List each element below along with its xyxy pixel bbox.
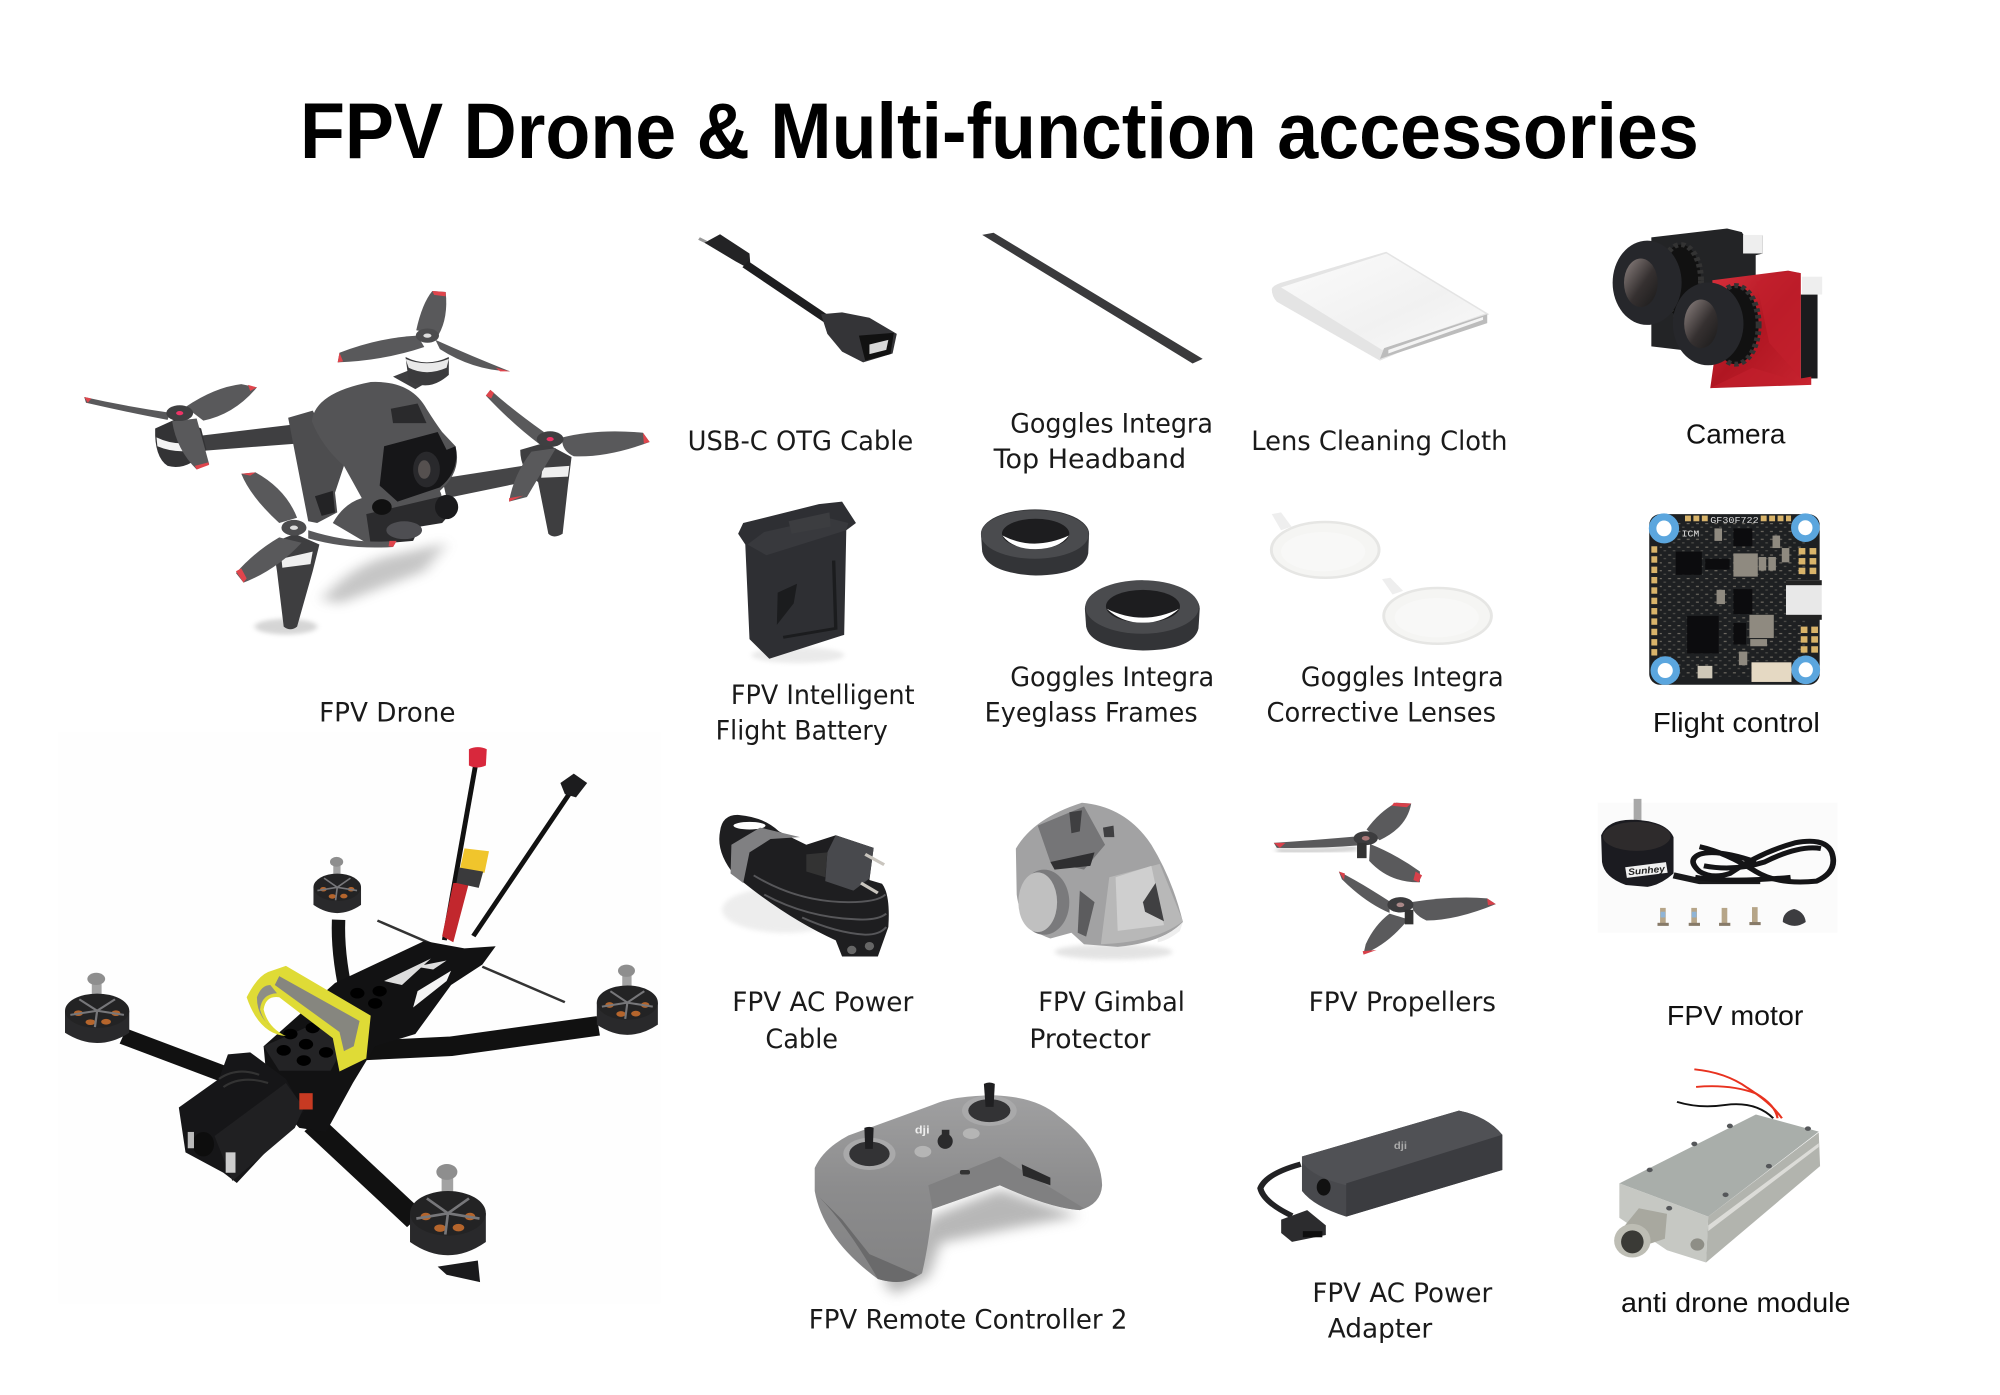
icon: motor with cable and screws <box>1598 799 1837 933</box>
panel: USB-C OTG Cable <box>688 234 913 457</box>
label: Camera: Camera <box>1686 419 1786 450</box>
sticks <box>377 921 565 1002</box>
panel: FPV Gimbal Protector <box>1016 803 1185 1055</box>
main plate <box>264 941 496 1132</box>
label: FPV Gimbal Protector: Protector <box>1029 1024 1150 1055</box>
label: Lens Cleaning Cloth: Lens Cleaning Cloth <box>1251 426 1508 457</box>
label: Goggles Integra Corrective Lenses: Goggles Integra <box>1301 662 1504 693</box>
icon: flight controller board: ICM <box>1682 530 1699 540</box>
icon: power adapter <box>1260 1111 1502 1242</box>
panel: FPV Remote Controller 2 <box>809 1083 1128 1336</box>
panel: FPV AC Power Adapter <box>1260 1111 1502 1345</box>
label: anti drone module: anti drone module <box>1621 1287 1851 1318</box>
panel: FPV Propellers <box>1274 803 1496 1018</box>
icon: remote controller <box>815 1083 1102 1294</box>
panel: FPV motor <box>1598 799 1837 1031</box>
panel: Goggles Integra Corrective Lenses <box>1267 512 1504 729</box>
icon: motor with cable and screws: Sunhey <box>1628 864 1666 878</box>
icon: AC power cable <box>719 815 889 956</box>
panel: racing drone frame <box>58 732 661 1303</box>
icon: USB-C OTG cable <box>699 234 897 362</box>
title: FPV Drone & Multi-function accessories <box>300 86 1699 175</box>
panel: FPV Intelligent Flight Battery <box>716 502 915 747</box>
label: USB-C OTG Cable: USB-C OTG Cable <box>688 426 913 457</box>
icon: remote controller: dji <box>915 1123 930 1136</box>
icon: FPV cameras <box>1613 229 1822 388</box>
label: Goggles Integra Top Headband: Top Headband <box>993 444 1186 475</box>
icon: power adapter: dji <box>1394 1140 1407 1152</box>
panel: anti drone module <box>1614 1069 1851 1318</box>
label: FPV AC Power Adapter: Adapter <box>1328 1314 1432 1345</box>
icon: flight controller board <box>1649 513 1822 685</box>
label: FPV AC Power Adapter <box>1312 1278 1492 1345</box>
label: FPV Intelligent Flight Battery: FPV Intelligent <box>731 680 915 711</box>
panel: Lens Cleaning Cloth <box>1251 252 1508 457</box>
label: FPV AC Power Adapter: FPV AC Power <box>1312 1278 1492 1309</box>
label: FPV Intelligent Flight Battery <box>716 680 915 747</box>
icon: anti drone module <box>1614 1069 1820 1263</box>
label: FPV AC Power Cable: Cable <box>765 1024 838 1055</box>
label: FPV Remote Controller 2: FPV Remote Controller 2 <box>809 1305 1128 1336</box>
icon: carbon fibre racing drone <box>58 732 661 1303</box>
label: Goggles Integra Corrective Lenses: Corrective Lenses <box>1267 698 1496 729</box>
label: Goggles Integra Corrective Lenses <box>1267 662 1504 729</box>
icon: propellers <box>1274 803 1496 955</box>
label: Goggles Integra Eyeglass Frames: Goggles Integra <box>1010 662 1214 693</box>
label: Goggles Integra Top Headband: Goggles Integra <box>1010 408 1213 439</box>
label: Flight control: Flight control <box>1653 707 1820 738</box>
label: Goggles Integra Eyeglass Frames <box>985 662 1214 729</box>
icon: headband strap <box>982 233 1203 363</box>
panel: FPV Drone <box>84 291 650 729</box>
label: FPV Drone: FPV Drone <box>319 698 456 729</box>
propellers <box>84 291 650 583</box>
label: FPV Propellers: FPV Propellers <box>1309 987 1496 1018</box>
label: FPV AC Power Cable: FPV AC Power <box>732 987 913 1018</box>
label: FPV AC Power Cable <box>732 987 913 1055</box>
arms <box>123 1036 237 1079</box>
front camera cage <box>179 1052 304 1183</box>
label: Goggles Integra Top Headband <box>993 408 1213 475</box>
icon: battery <box>738 502 856 663</box>
label: FPV Intelligent Flight Battery: Flight Battery <box>716 716 888 747</box>
motors <box>65 973 129 1043</box>
icon: folded cloth <box>1272 252 1489 361</box>
panel: Goggles Integra Top Headband <box>982 233 1213 475</box>
strap <box>247 966 371 1072</box>
icon: corrective lenses <box>1271 512 1491 644</box>
motors and legs <box>155 418 206 467</box>
label: FPV Gimbal Protector: FPV Gimbal <box>1038 987 1185 1018</box>
label: Goggles Integra Eyeglass Frames: Eyeglass Frames <box>985 698 1198 729</box>
icon: gimbal protector <box>1016 803 1183 960</box>
icon: DJI FPV drone <box>84 291 650 634</box>
panel: Goggles Integra Eyeglass Frames <box>981 509 1214 729</box>
label: FPV motor: FPV motor <box>1667 1000 1803 1031</box>
antennas <box>444 765 476 940</box>
icon: eyeglass frames <box>981 509 1200 651</box>
panel: Camera <box>1613 229 1822 450</box>
panel: FPV AC Power Cable <box>719 815 913 1055</box>
panel: Flight control <box>1649 513 1822 738</box>
icon: flight controller board: GF30F722 <box>1710 517 1759 527</box>
label: FPV Gimbal Protector <box>1029 987 1185 1055</box>
